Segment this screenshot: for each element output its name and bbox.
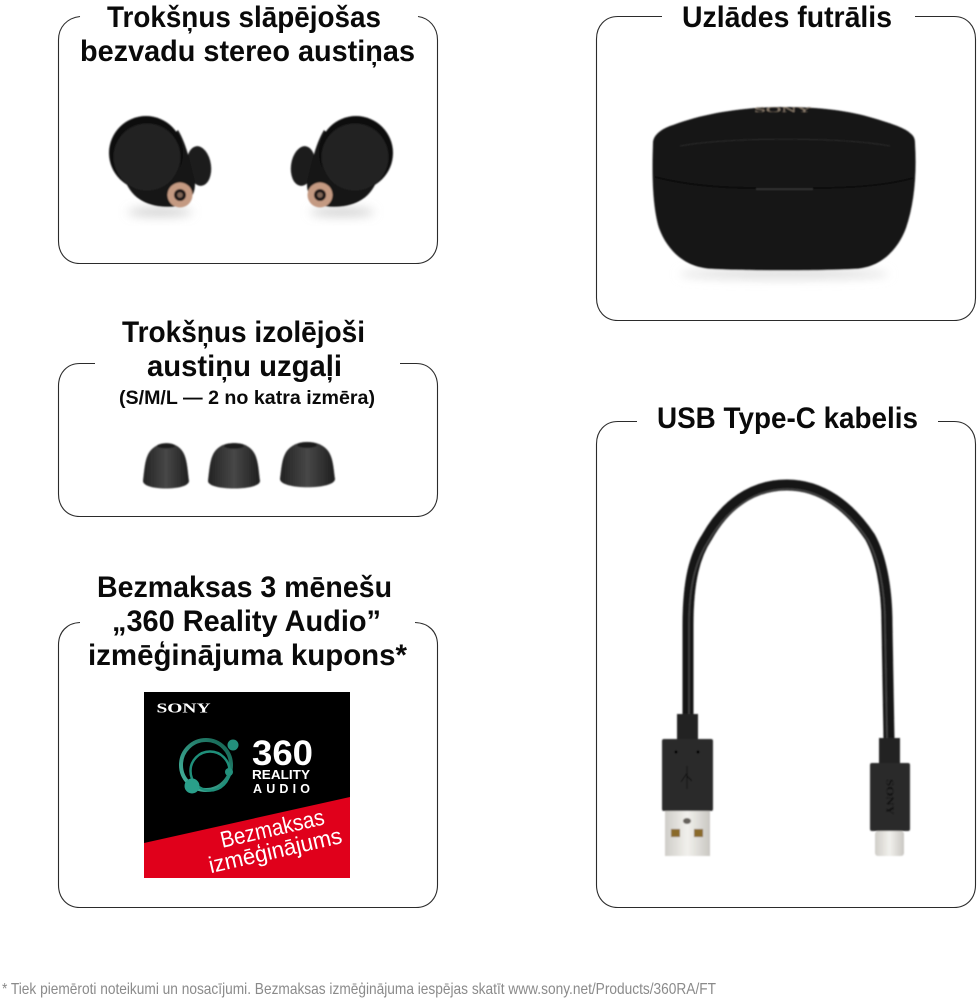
red banner <box>144 797 350 878</box>
panel outline <box>596 422 976 908</box>
panel outline <box>58 16 438 264</box>
panel: earbuds <box>58 1 438 264</box>
icon: left earbud <box>109 116 214 216</box>
heading: coupon: Bezmaksas 3 mēnešu <box>97 571 392 604</box>
heading: ear tips: Trokšņus izolējoši <box>122 316 365 349</box>
panel outline <box>58 364 438 516</box>
heading: ear tips: (S/M/L — 2 no katra izmēra) <box>119 388 375 409</box>
Sony logo: SONY <box>156 700 211 716</box>
panel: USB cable <box>596 402 976 908</box>
panel: charging case <box>596 1 976 320</box>
heading: ear tips <box>119 316 375 409</box>
360 wordmark <box>252 734 313 796</box>
panel: coupon <box>58 571 438 908</box>
panel: ear tips <box>58 316 438 516</box>
heading: ear tips: austiņu uzgaļi <box>147 350 342 383</box>
heading: earbuds: Trokšņus slāpējošas <box>107 1 381 34</box>
heading: earbuds: bezvadu stereo austiņas <box>80 35 415 68</box>
icon: USB-C plug <box>870 738 910 856</box>
360 wordmark: 360 <box>252 734 313 773</box>
360 wordmark: REALITY <box>252 768 311 782</box>
icon: large ear tip <box>280 442 335 487</box>
panel outline <box>58 622 438 908</box>
heading: earbuds <box>80 1 415 68</box>
icon: charging case <box>653 106 916 279</box>
icon: right earbud <box>288 116 393 216</box>
icon: USB-C plug: SONY <box>884 779 894 816</box>
heading: coupon: „360 Reality Audio” <box>112 605 381 638</box>
badge: 360 Reality Audio <box>144 692 350 878</box>
heading: USB cable: USB Type-C kabelis <box>657 402 918 435</box>
360 wordmark: AUDIO <box>253 782 310 796</box>
banner text: Bezmaksas <box>218 804 327 853</box>
icon: medium ear tip <box>208 443 260 488</box>
banner text: izmēģinājums <box>206 822 344 878</box>
icon: small ear tip <box>143 443 189 488</box>
icon: charging case: SONY <box>754 106 812 114</box>
footnote: * Tiek piemēroti noteikumi un nosacījumi. Bezmaksas izmēģinājuma iespējas skatīt www.sony.net/Products/360RA/FT <box>2 980 716 998</box>
panel outline <box>596 16 976 320</box>
icon: cable <box>688 485 889 740</box>
heading: charging case: Uzlādes futrālis <box>682 1 892 34</box>
heading: coupon <box>88 571 407 672</box>
icon: 360 orbit logo <box>181 740 238 794</box>
icon: USB-A plug <box>662 714 713 856</box>
heading: coupon: izmēģinājuma kupons* <box>88 639 407 672</box>
